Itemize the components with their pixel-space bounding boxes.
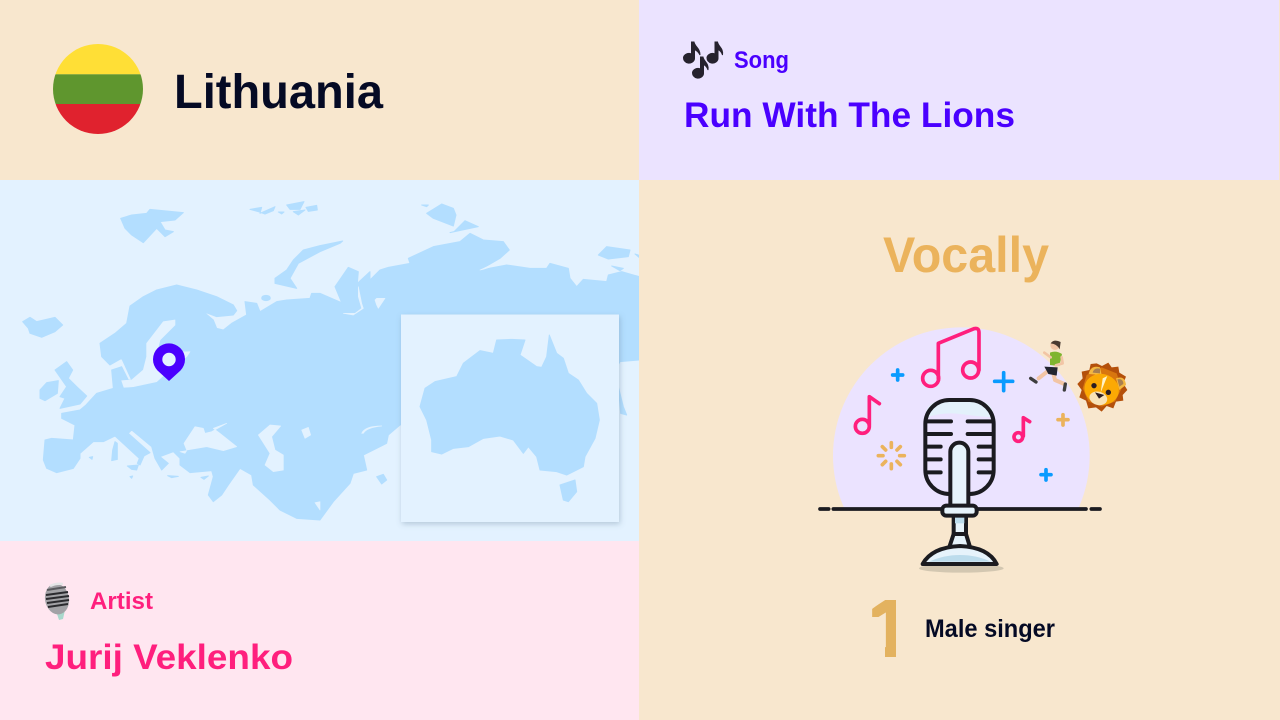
map: Eurasia (23, 202, 639, 520)
icon: large music note (923, 328, 979, 386)
panel: map (0, 180, 639, 541)
icon: studio microphone (42, 582, 72, 620)
map: Australia (420, 335, 599, 502)
icon: location pin (153, 343, 185, 381)
icon: Lithuanian flag (53, 44, 143, 134)
Svalbard (121, 209, 183, 243)
icon: blue plus signs (893, 370, 1051, 480)
icon: sunburst (878, 443, 904, 469)
Great Britain (55, 362, 87, 408)
icon: lion face (1077, 363, 1127, 412)
label: song: Song (734, 47, 789, 74)
Japan sliver (618, 387, 627, 415)
heading: artist name: Jurij Veklenko (45, 638, 293, 677)
panel: country (53, 44, 384, 134)
ground line (820, 503, 1100, 514)
icon: running man (1031, 341, 1065, 390)
label: artist: Artist (90, 588, 153, 615)
Ireland (40, 381, 58, 401)
Kolguev (262, 295, 270, 301)
inset panel: Australia (401, 314, 619, 522)
seas inside land (122, 260, 507, 510)
dome backdrop (833, 327, 1090, 508)
label: Male singer (925, 615, 1055, 643)
icon: microphone (923, 400, 997, 564)
panel: vocals (818, 236, 1128, 657)
New Siberian Islands (598, 247, 639, 271)
panel: artist (0, 541, 639, 720)
floor shadow (919, 564, 1004, 573)
heading: country name: Lithuania (174, 66, 383, 119)
panel: song (639, 0, 1279, 180)
Franz Josef Land (250, 202, 317, 215)
icon: musical notes (684, 42, 723, 78)
number: 1 (868, 582, 914, 675)
icon: gold plus (1058, 415, 1068, 425)
illustration: singing microphone (820, 327, 1127, 584)
heading: vocally: Vocally (883, 227, 1049, 283)
icon: small music note (1014, 418, 1030, 441)
Iceland (23, 317, 63, 337)
stat: singer count (872, 600, 1055, 657)
Severnaya Zemlya (422, 204, 478, 233)
heading: song title: Run With The Lions (684, 96, 1015, 135)
Novaya Zemlya (275, 241, 343, 288)
icon: left music note (855, 397, 879, 433)
Mediterranean islands (89, 442, 208, 479)
Sri Lanka (377, 474, 387, 484)
